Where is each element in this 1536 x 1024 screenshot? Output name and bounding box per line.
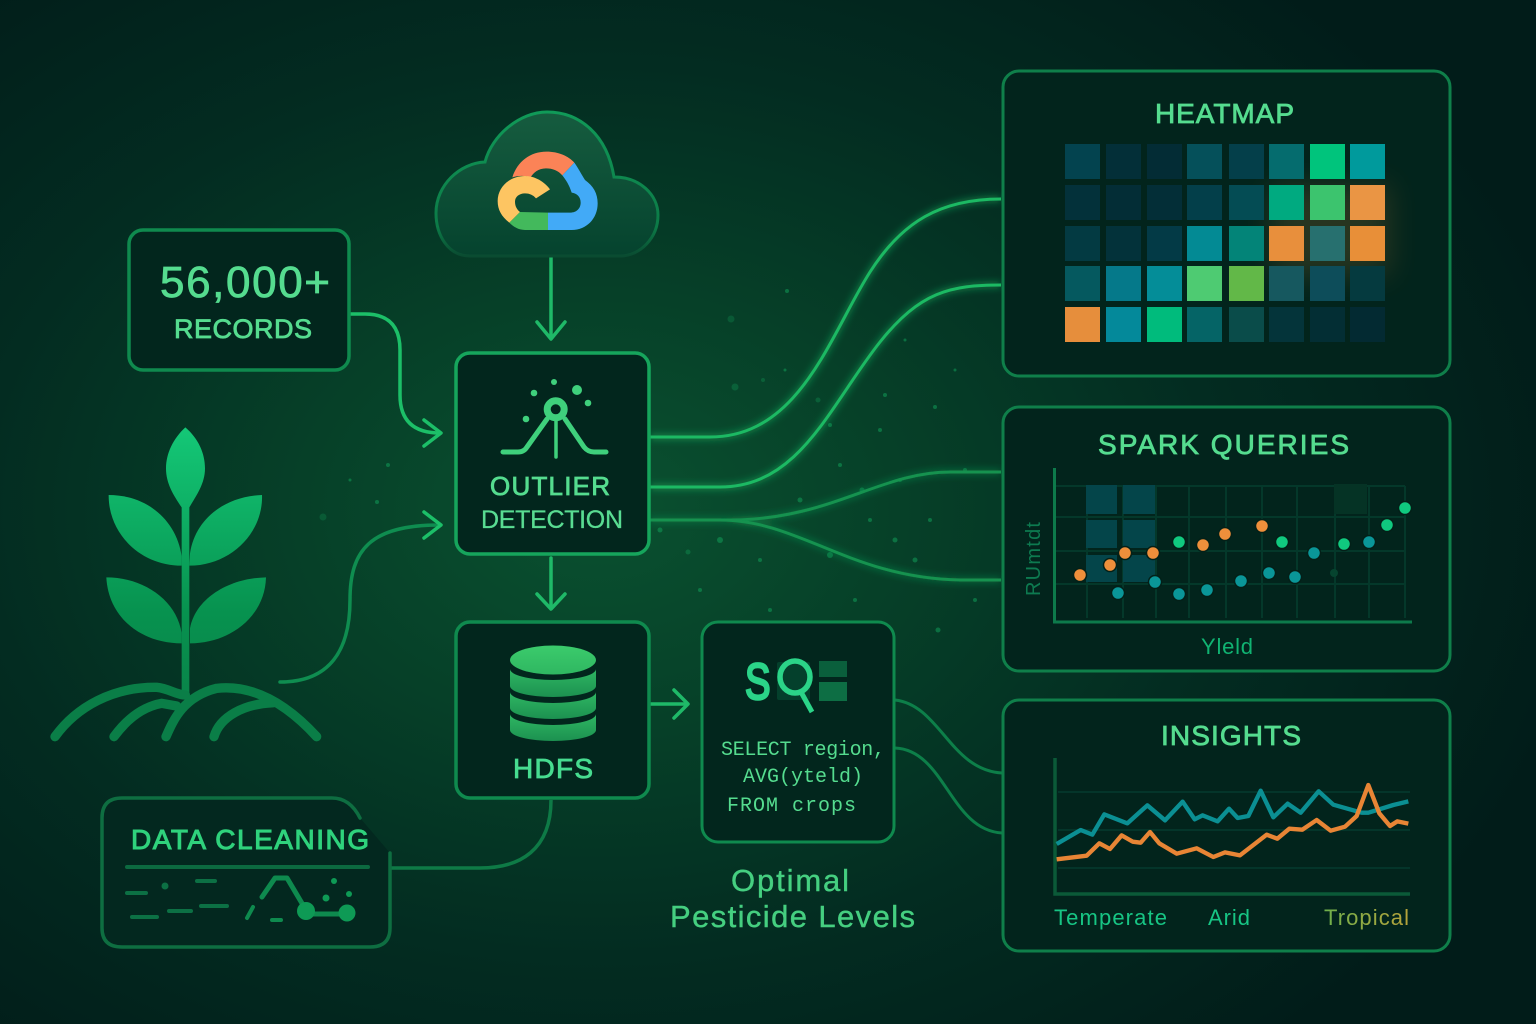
legend: regions: Arid [1208, 905, 1250, 930]
connector: HDFS to data cleaning [390, 800, 551, 868]
axis label: y: RUmtdt [1023, 522, 1045, 596]
legend: regions [1054, 905, 1409, 930]
legend: regions: Temperate [1054, 905, 1167, 930]
icon: SQL magnifier: S [745, 653, 771, 710]
caption: optimal pesticide levels: Optimal [731, 863, 849, 898]
axis label: x: Yleld [1201, 634, 1253, 659]
arrow: outlier detection to HDFS [537, 558, 565, 609]
chart: line chart [1055, 758, 1410, 894]
chart: scatter plot [1054, 468, 1412, 622]
code: SQL statement [721, 739, 885, 818]
icon: SQL magnifier [745, 653, 847, 712]
icon: plant [55, 427, 317, 737]
heading: heatmap: HEATMAP [1155, 98, 1294, 129]
code: SQL statement: AVG(yteld) [743, 766, 863, 789]
label: outlier: OUTLIER [490, 471, 610, 501]
caption: optimal pesticide levels: Pesticide Levels [670, 899, 915, 934]
panel: heatmap [1003, 71, 1450, 376]
panel: insights [1003, 700, 1450, 951]
heading: data cleaning: DATA CLEANING [131, 824, 369, 855]
label: records: RECORDS [174, 314, 312, 344]
arrow: cloud to outlier detection [537, 256, 565, 339]
caption: optimal pesticide levels [670, 863, 915, 934]
chart: heatmap grid [1065, 144, 1390, 342]
arrow: records to outlier detection [350, 314, 441, 446]
heading: insights: INSIGHTS [1161, 720, 1301, 751]
code: SQL statement: SELECT region, [721, 739, 885, 762]
panel: data cleaning [102, 798, 390, 947]
connector: outlier detection to output panels [650, 199, 1001, 580]
panel: outlier detection [456, 353, 649, 554]
label: detection: DETECTION [481, 506, 623, 534]
code: SQL statement: FROM crops [727, 795, 856, 818]
icon: database [510, 646, 596, 741]
panel: SQL query [702, 622, 894, 842]
icon: outlier bell curve [503, 379, 606, 457]
background data particles [320, 289, 977, 632]
panel: records [129, 230, 349, 370]
connector: SQL to insights [895, 700, 1002, 833]
arrow: plant to outlier detection [280, 512, 441, 682]
stat: 56,000+: 56,000+ [160, 258, 330, 307]
panel: HDFS [456, 622, 649, 798]
legend: regions: Tropical [1324, 905, 1409, 930]
icon: noisy data cleaned [127, 878, 356, 922]
panel: spark queries [1003, 407, 1450, 671]
arrow: HDFS to SQL [651, 690, 688, 718]
label: HDFS: HDFS [513, 753, 593, 784]
heading: spark queries: SPARK QUERIES [1098, 429, 1349, 460]
icon: Google Cloud [436, 112, 658, 256]
